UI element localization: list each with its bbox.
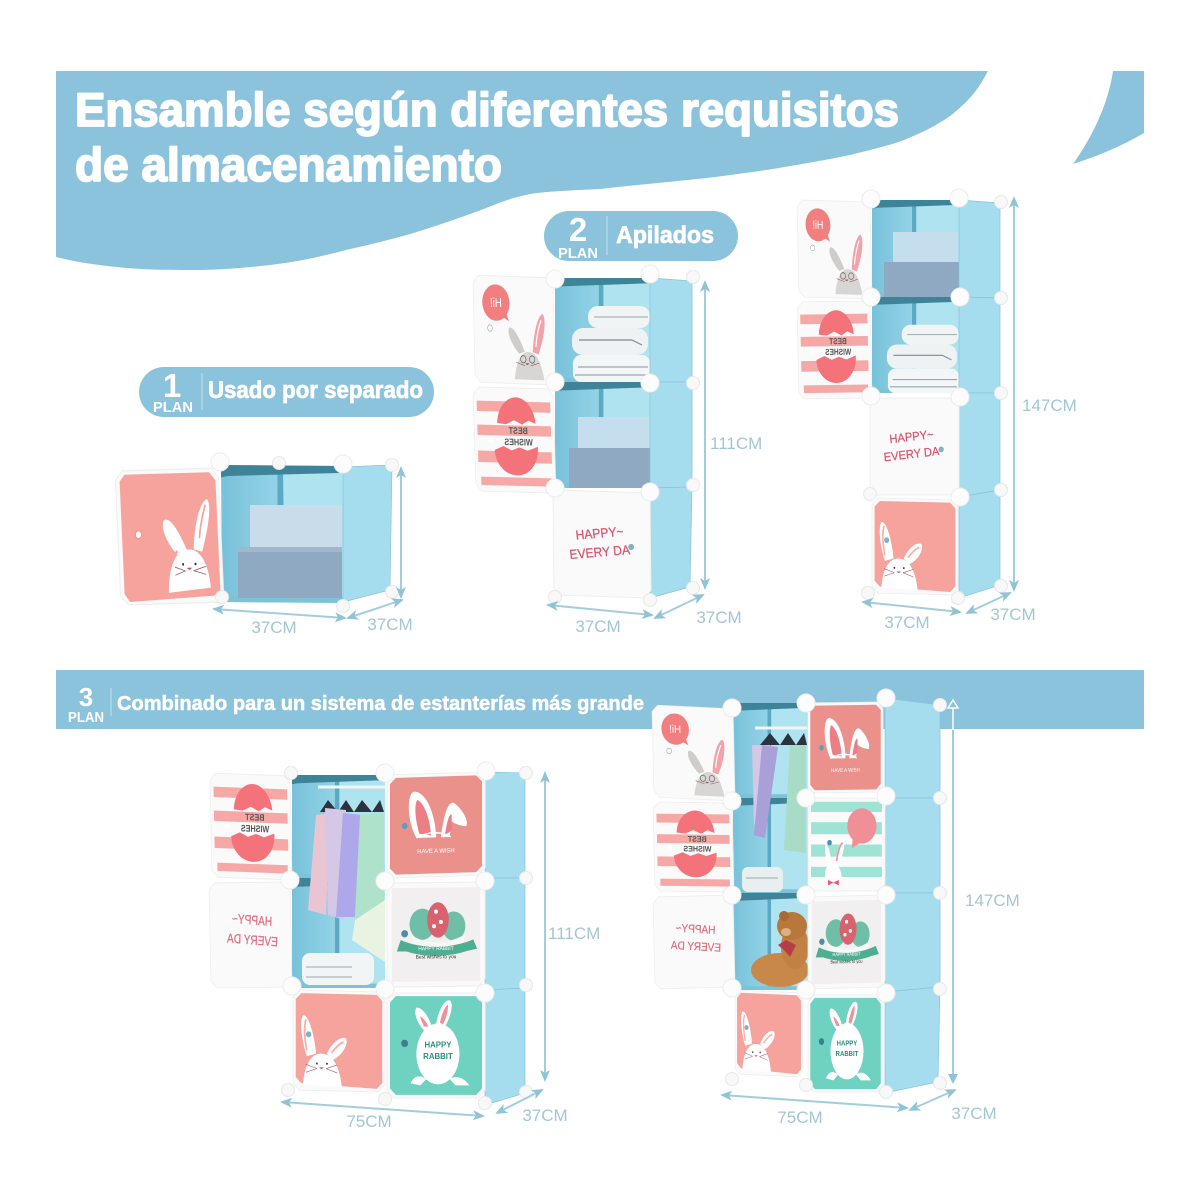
dimension labels: [884, 396, 1077, 632]
dimension labels: 37CM: [251, 618, 297, 637]
connectors: [723, 689, 946, 1098]
plan 2 cabinet: 4 cubes: [797, 189, 1077, 632]
connectors: [281, 762, 532, 1110]
door: teal rabbit: RABBIT: [836, 1051, 859, 1058]
banner corner shape: [1073, 71, 1144, 164]
door: Hi rabbit: [797, 200, 872, 299]
door: teal rabbit: RABBIT: [423, 1052, 453, 1061]
door: teal rabbit: HAPPY: [837, 1040, 858, 1048]
connectors: [546, 265, 700, 606]
interior: [292, 775, 385, 988]
plan 3 cabinet: 6 cubes: [209, 762, 600, 1131]
door: have a wish: [387, 772, 485, 878]
connectors: [211, 453, 398, 612]
towels: [572, 306, 650, 382]
door: pink rabbit: [735, 990, 803, 1077]
plan 1 cabinet: [115, 453, 413, 637]
towels: [887, 325, 959, 393]
plan 1 pill: [139, 367, 434, 417]
dimension labels: 37CM: [367, 615, 413, 634]
side panels: [959, 200, 1000, 598]
door: happy every day: HAPPY~: [889, 428, 934, 446]
dimension labels: [777, 891, 1020, 1127]
towel: [742, 867, 783, 892]
door: teal stripes: [808, 798, 885, 891]
plan 1 pill: Usado por separado: [208, 377, 423, 404]
plan 3 heading: PLAN: [68, 709, 104, 726]
door: have a wish: HAVE A WISH: [417, 848, 455, 855]
door: happy every day: EVERY DA: [883, 445, 940, 464]
teddy bear: [751, 911, 809, 987]
door: happy every day mirrored: EVERY DA: [670, 939, 721, 955]
hanging clothes: [752, 728, 807, 853]
plan 3 heading: Combinado para un sistema de estanterías más grande: [117, 693, 644, 715]
door: happy every day mirrored: HAPPY~: [675, 922, 716, 937]
door: easter eggs: HAPPY RABBIT: [418, 946, 454, 952]
door: best wishes: BEST: [687, 834, 707, 844]
plan 2 pill: [544, 211, 738, 262]
door: have a wish: [808, 702, 883, 793]
storage boxes: [238, 505, 342, 598]
plan 3 heading: [68, 682, 644, 726]
storage boxes: [884, 232, 959, 297]
door: easter eggs: Best wishes to you: [416, 954, 457, 961]
dimension arrows: [548, 282, 705, 618]
door: teal rabbit: [387, 993, 485, 1098]
dimension labels: 37CM: [696, 608, 742, 627]
hanging clothes: [308, 787, 385, 962]
side panels: [485, 772, 525, 1105]
door: best wishes: WISHES: [504, 436, 533, 448]
interior: [733, 703, 808, 990]
door: have a wish: HAVE A WISH: [831, 767, 860, 774]
door: Hi rabbit: Hi!: [812, 220, 823, 232]
dimension labels: [346, 924, 600, 1131]
header banner: [56, 71, 1144, 270]
dimension labels: 37CM: [990, 605, 1036, 624]
top height marker: [948, 700, 958, 730]
dimension arrows: [214, 468, 402, 618]
side panel: [343, 465, 392, 602]
dimension labels: 147CM: [1022, 396, 1077, 415]
door: pink rabbit: [293, 990, 385, 1092]
plan 3 cabinet: 8 cubes: [652, 689, 1020, 1127]
title: [75, 83, 899, 191]
plan 1 pill: PLAN: [153, 399, 193, 416]
plan 2 pill: 2: [569, 211, 587, 248]
door: easter eggs: Best wishes to you: [830, 958, 863, 965]
side panels: [650, 278, 692, 598]
door: best wishes: BEST: [245, 811, 265, 823]
dimension arrows: [722, 730, 958, 1110]
storage boxes: [569, 417, 650, 488]
plan 3 heading: 3: [79, 682, 93, 712]
dimension labels: 37CM: [575, 617, 621, 636]
dimension labels: 147CM: [965, 891, 1020, 910]
towel: [302, 953, 374, 985]
connectors: [862, 189, 1008, 604]
door: teal rabbit: [808, 995, 883, 1092]
door: happy every day mirrored: [209, 882, 292, 988]
plan 3 band: [56, 670, 1144, 729]
door: happy every day: [870, 398, 959, 495]
dimension labels: [575, 434, 762, 636]
dimension arrows: [282, 773, 545, 1116]
door: best wishes: [797, 301, 872, 399]
door: best wishes: WISHES: [240, 822, 269, 835]
dimension labels: 111CM: [710, 434, 762, 453]
door: best wishes: BEST: [508, 425, 528, 436]
dimension labels: 37CM: [884, 613, 930, 632]
door: Hi rabbit: [652, 705, 735, 801]
dimension labels: 111CM: [548, 924, 600, 943]
door: happy every day: HAPPY~: [575, 524, 624, 543]
banner shape: [56, 71, 988, 270]
dimension labels: 37CM: [522, 1106, 568, 1125]
dimension labels: [251, 615, 413, 637]
door: Hi rabbit: [473, 275, 555, 385]
interior: [221, 465, 344, 603]
door: [115, 468, 224, 605]
door: pink rabbit: [872, 498, 958, 595]
plan 2 pill: PLAN: [558, 245, 598, 262]
plan 1 pill: 1: [163, 367, 181, 404]
door: best wishes: BEST: [829, 336, 847, 347]
door: best wishes: [653, 802, 734, 892]
door: happy every day: [553, 490, 651, 598]
door: happy every day mirrored: [653, 895, 735, 989]
plan 2 cabinet: 3 cubes: [473, 265, 762, 636]
title: Ensamble según diferentes requisitos: [75, 83, 899, 136]
door: best wishes: WISHES: [683, 844, 712, 854]
door: happy every day mirrored: HAPPY~: [232, 912, 272, 929]
dimension labels: 75CM: [777, 1108, 823, 1127]
door: easter eggs: [387, 882, 485, 987]
plan 2 pill: Apilados: [616, 222, 714, 249]
dimension arrows: [863, 198, 1014, 613]
dimension labels: 75CM: [346, 1112, 392, 1131]
door: easter eggs: HAPPY RABBIT: [833, 951, 861, 957]
door: Hi rabbit: Hi!: [669, 724, 681, 736]
door: best wishes: [473, 387, 556, 493]
interior: [555, 278, 650, 488]
door: Hi rabbit: Hi!: [490, 296, 502, 310]
door: happy every day: EVERY DA: [569, 543, 631, 562]
interior: [872, 200, 959, 393]
title: de almacenamiento: [75, 138, 502, 191]
door: best wishes: [210, 773, 292, 880]
door: happy every day mirrored: EVERY DA: [227, 931, 278, 950]
door: easter eggs: [808, 895, 885, 989]
side panels: [885, 698, 940, 1093]
door: teal rabbit: HAPPY: [424, 1040, 452, 1050]
door: best wishes: WISHES: [825, 347, 851, 357]
dimension labels: 37CM: [951, 1104, 997, 1123]
